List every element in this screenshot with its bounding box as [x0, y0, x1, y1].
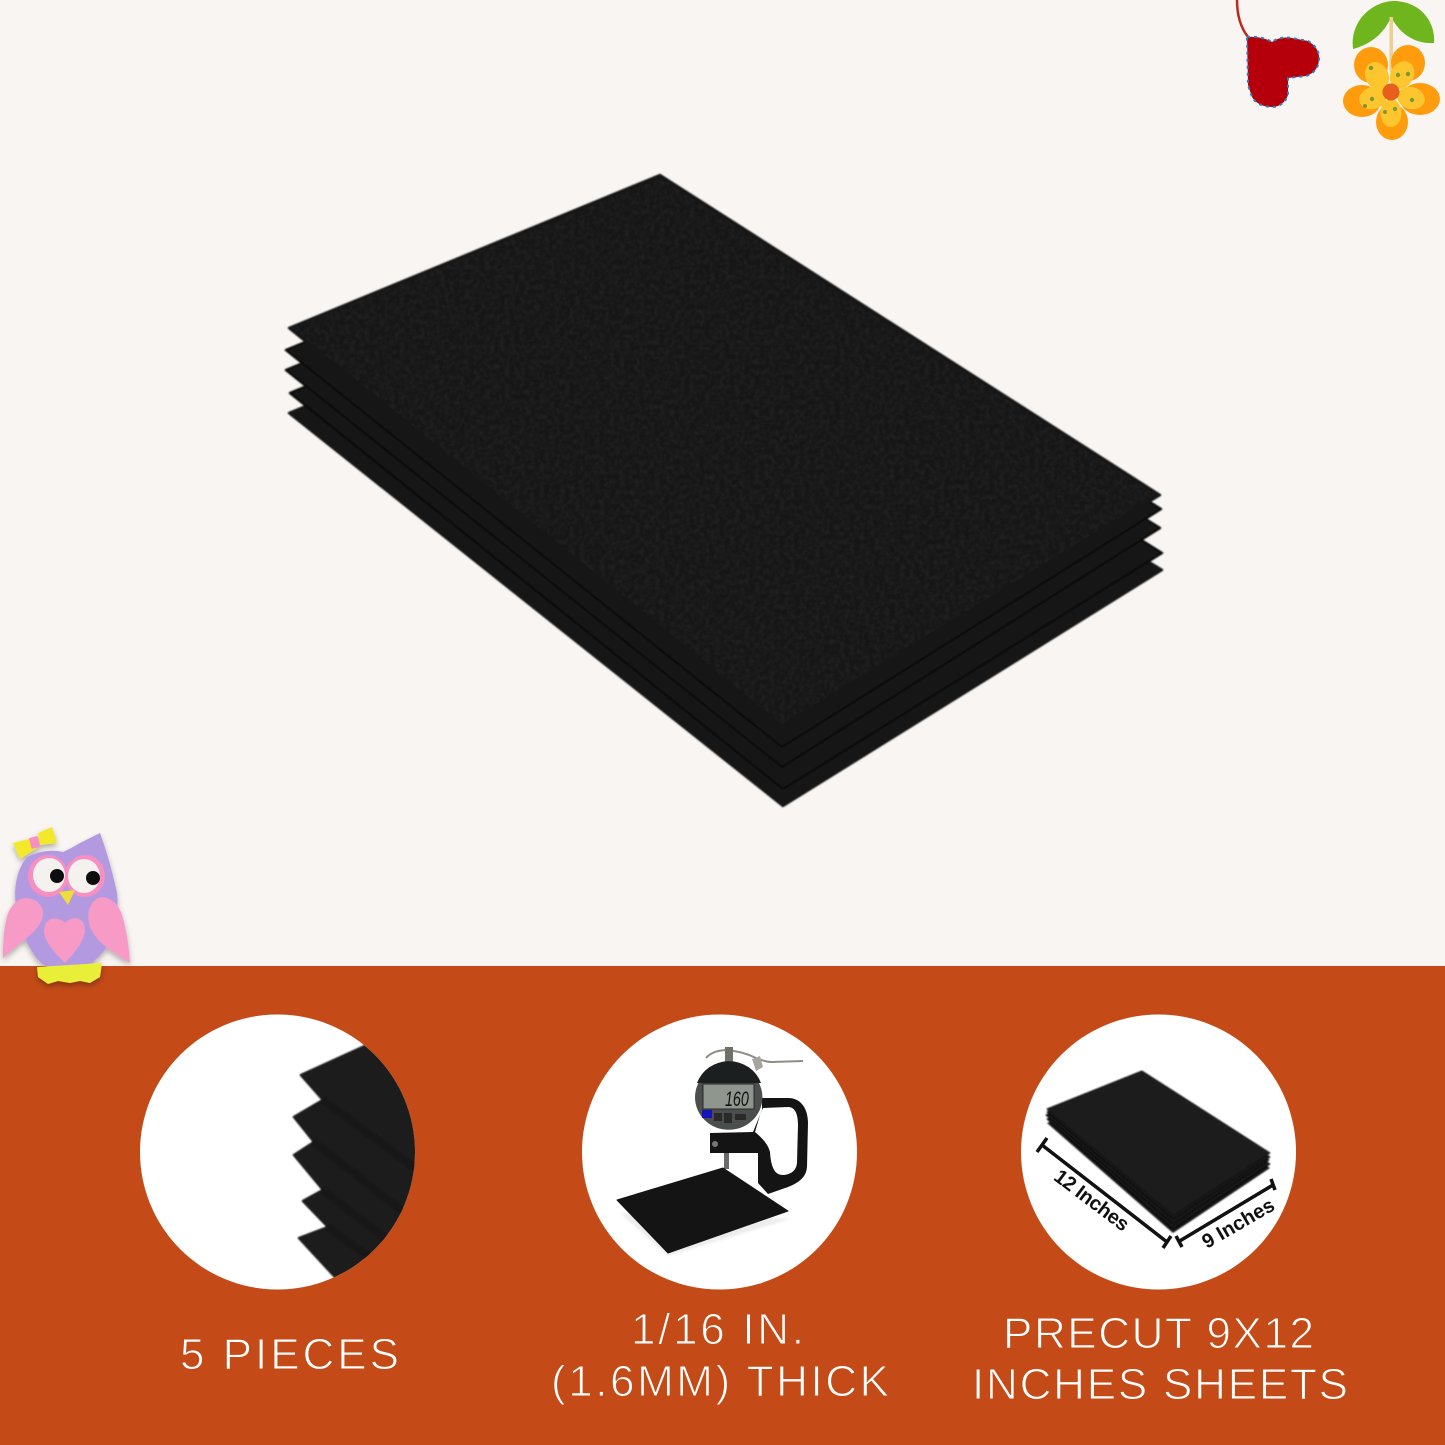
panel: thickness [551, 1014, 889, 1406]
mini felt stack [1046, 1071, 1270, 1233]
orange feature band [0, 966, 1445, 1445]
label: 9 inches: 9 Inches [1198, 1194, 1279, 1253]
caption [551, 1305, 889, 1406]
panel: size [972, 1014, 1348, 1409]
label: 12 inches: 12 Inches [1050, 1166, 1133, 1236]
caption: 1/16 IN. [631, 1305, 804, 1354]
gauge top lever [706, 1047, 803, 1071]
gauge dial [695, 1061, 762, 1130]
gauge frame [710, 1098, 808, 1194]
caption [972, 1309, 1348, 1409]
icon: purple felt owl [3, 827, 130, 984]
felt swatch [620, 1213, 790, 1256]
dimension line: 9 inches [1176, 1179, 1275, 1247]
white circle photo: sheet edges [140, 1014, 430, 1300]
white circle photo: thickness gauge on felt [582, 1014, 857, 1290]
icon: orange felt flower with green leaves [1343, 1, 1440, 140]
panel: 5 pieces [140, 1014, 430, 1379]
caption: PRECUT 9X12 [1003, 1309, 1314, 1358]
caption: (1.6MM) THICK [551, 1357, 889, 1406]
caption: 5 PIECES [180, 1330, 399, 1379]
gauge dial: 160 [725, 1087, 749, 1111]
page background [0, 0, 1445, 966]
caption: INCHES SHEETS [972, 1360, 1348, 1409]
icon: red felt heart ornament [1237, 0, 1319, 107]
product photo: stack of five black felt sheets [286, 175, 1162, 806]
white circle photo: mini stack with dimensions [1021, 1014, 1296, 1290]
dimension line: 12 inches [1037, 1138, 1171, 1248]
